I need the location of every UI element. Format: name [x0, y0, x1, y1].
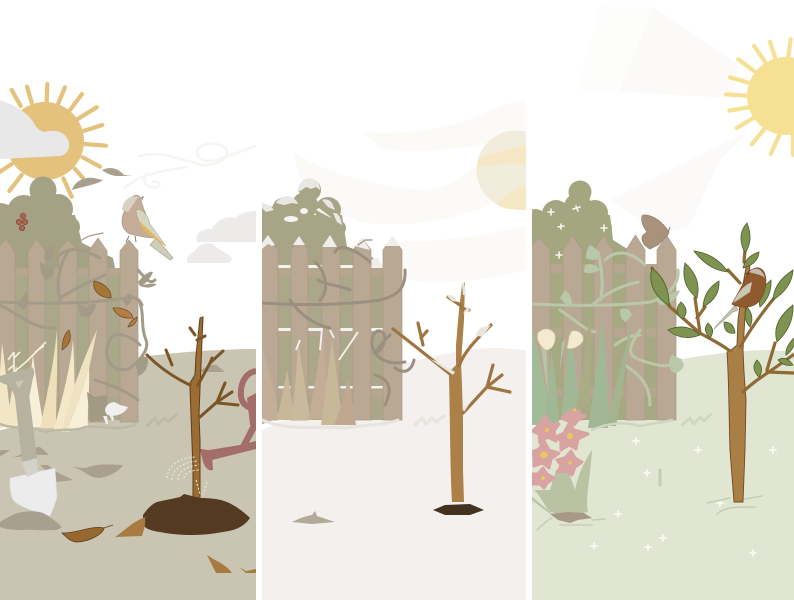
ground tufts	[0, 415, 176, 432]
winter ground leaf	[292, 511, 335, 524]
fence	[0, 238, 138, 422]
hedgehog	[87, 392, 108, 422]
white daisies	[591, 438, 776, 556]
butterfly	[642, 215, 670, 249]
panel: autumn	[0, 84, 257, 600]
spring tree	[652, 250, 794, 502]
winter soil	[433, 504, 484, 515]
cloud over sun	[0, 100, 69, 159]
wheat sprig	[8, 342, 46, 372]
panel: winter	[262, 130, 526, 600]
vine leaves	[18, 246, 157, 376]
leaf on grass	[62, 330, 70, 350]
spring ground	[532, 350, 794, 600]
winter vines	[262, 240, 414, 405]
tall pale grass	[0, 330, 97, 432]
spring vine leaves	[560, 245, 684, 373]
sun	[0, 84, 106, 197]
panel: spring	[522, 6, 794, 600]
spring bird	[714, 268, 766, 329]
bush	[0, 176, 115, 268]
ground	[0, 349, 256, 600]
spring ground tufts	[592, 414, 711, 430]
spring fence	[528, 235, 676, 420]
tree	[147, 317, 238, 498]
pink flowers	[532, 408, 592, 523]
winter tree	[393, 282, 510, 502]
winter ground	[262, 348, 526, 600]
gray dirt mound	[0, 511, 62, 530]
sun beams	[577, 6, 750, 235]
flowering bush	[522, 180, 657, 420]
spring grass	[530, 310, 632, 428]
winter grass	[260, 327, 358, 425]
water drops	[167, 457, 207, 495]
soil mound	[143, 494, 250, 535]
bush with snow	[262, 178, 374, 265]
spring sun	[726, 39, 794, 155]
winter sky wind bands	[295, 100, 526, 282]
gray ground leaves	[0, 365, 225, 482]
clouds right	[187, 211, 256, 263]
tree leaves	[651, 223, 794, 377]
flying leaves	[72, 168, 132, 190]
spring vines	[532, 252, 680, 405]
berries	[16, 213, 28, 231]
mushroom	[103, 402, 128, 424]
tulips	[537, 329, 583, 350]
bird	[122, 195, 173, 260]
winter ground tufts	[262, 416, 444, 428]
watering can	[200, 371, 257, 470]
grass under tree	[537, 470, 762, 530]
wind swirls	[125, 144, 255, 188]
pale sun	[476, 130, 526, 210]
winter fence	[258, 235, 402, 420]
vines	[0, 233, 155, 400]
shovel	[0, 367, 57, 516]
brown ground leaves	[62, 510, 256, 573]
brown leaves on fence	[94, 281, 137, 327]
